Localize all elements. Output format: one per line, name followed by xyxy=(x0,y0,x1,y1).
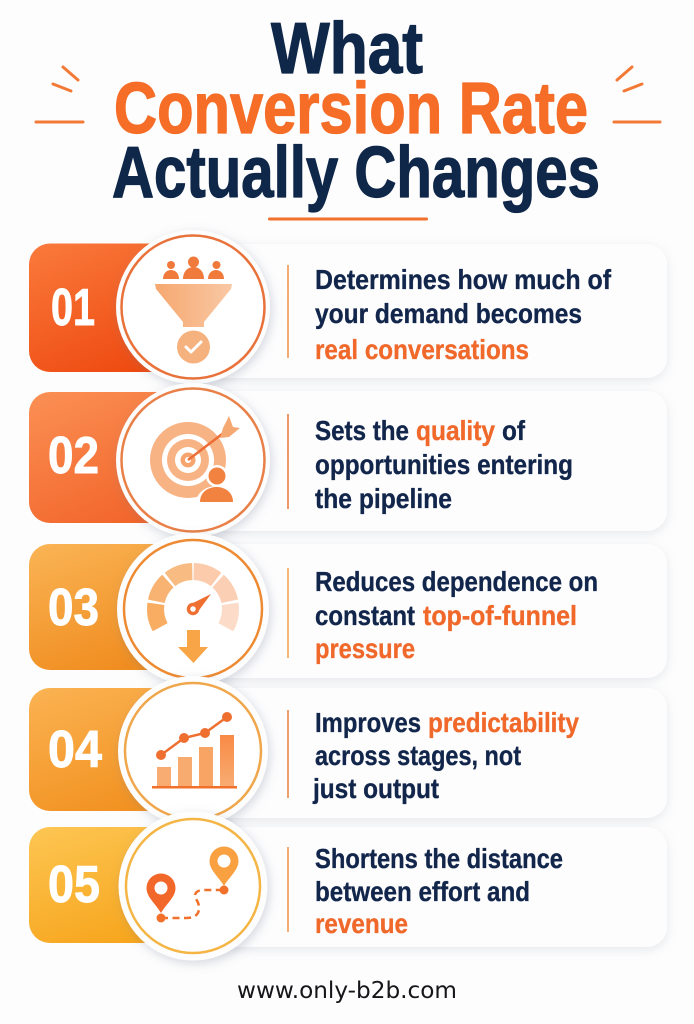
title xyxy=(112,9,600,213)
card 4 xyxy=(190,688,667,818)
text 5: revenue xyxy=(315,908,408,939)
divider 3 xyxy=(287,568,289,658)
footer url: www.only-b2b.com xyxy=(237,978,457,1004)
icon: rising bar chart with trend line xyxy=(152,712,237,788)
text 2: Sets the xyxy=(315,415,409,446)
number 04: 04 xyxy=(48,721,102,779)
icon: right accent rays xyxy=(614,67,660,122)
text 2: quality xyxy=(416,415,495,446)
number 05: 05 xyxy=(48,856,100,914)
panel: row 2 xyxy=(29,383,667,537)
number 01: 01 xyxy=(51,279,95,337)
panel: row 3 xyxy=(29,533,667,685)
icon circle 4 xyxy=(118,676,268,826)
icon circle 2 xyxy=(116,383,270,537)
text 2: opportunities entering xyxy=(315,449,573,480)
text 1: your demand becomes xyxy=(315,298,582,329)
title: What xyxy=(271,9,423,89)
icon circle 5 xyxy=(118,812,268,960)
icon: target with arrow and person xyxy=(150,416,240,504)
text 3: top-of-funnel xyxy=(423,600,577,631)
panel: row 1 xyxy=(29,230,667,384)
text 4: just output xyxy=(312,773,439,804)
text 4: Improves xyxy=(315,707,421,738)
card 1 xyxy=(190,244,667,378)
title: Conversion Rate xyxy=(114,69,588,149)
badge 2 xyxy=(29,392,209,523)
text 5: Shortens the distance xyxy=(315,843,563,874)
text 3: constant xyxy=(315,600,415,631)
badge 1 xyxy=(29,244,209,372)
divider 5 xyxy=(287,847,289,932)
icon: left accent rays xyxy=(36,67,83,122)
divider 4 xyxy=(287,710,289,798)
text 5: between effort and xyxy=(315,876,530,907)
divider 2 xyxy=(287,414,289,509)
card 5 xyxy=(190,827,667,947)
text 4: across stages, not xyxy=(315,740,521,771)
title underline xyxy=(268,218,428,220)
text 1 xyxy=(315,264,612,365)
card 2 xyxy=(190,391,667,531)
text 2 xyxy=(315,415,573,514)
icon: two map pins with dashed route xyxy=(146,846,238,922)
badge 5 xyxy=(29,827,209,943)
panel: row 4 xyxy=(29,676,667,826)
text 1: real conversations xyxy=(315,334,529,365)
divider 1 xyxy=(287,265,289,358)
number 03: 03 xyxy=(48,579,99,637)
text 5 xyxy=(315,843,563,939)
panel: row 5 xyxy=(29,812,667,960)
text 3 xyxy=(315,566,598,664)
card 3 xyxy=(190,544,667,678)
icon: funnel with people and check xyxy=(155,256,232,364)
text 3: Reduces dependence on xyxy=(315,566,598,597)
badge 4 xyxy=(29,688,209,811)
number 02: 02 xyxy=(48,427,99,485)
icon circle 3 xyxy=(117,533,269,685)
badge 3 xyxy=(29,544,209,670)
icon: gauge with down arrow xyxy=(156,572,230,663)
text 4: predictability xyxy=(428,707,579,738)
text 2: the pipeline xyxy=(315,483,452,514)
text 3: pressure xyxy=(315,633,415,664)
text 4 xyxy=(312,707,579,804)
text 2: of xyxy=(502,415,526,446)
text 1: Determines how much of xyxy=(315,264,612,295)
icon circle 1 xyxy=(116,230,270,384)
